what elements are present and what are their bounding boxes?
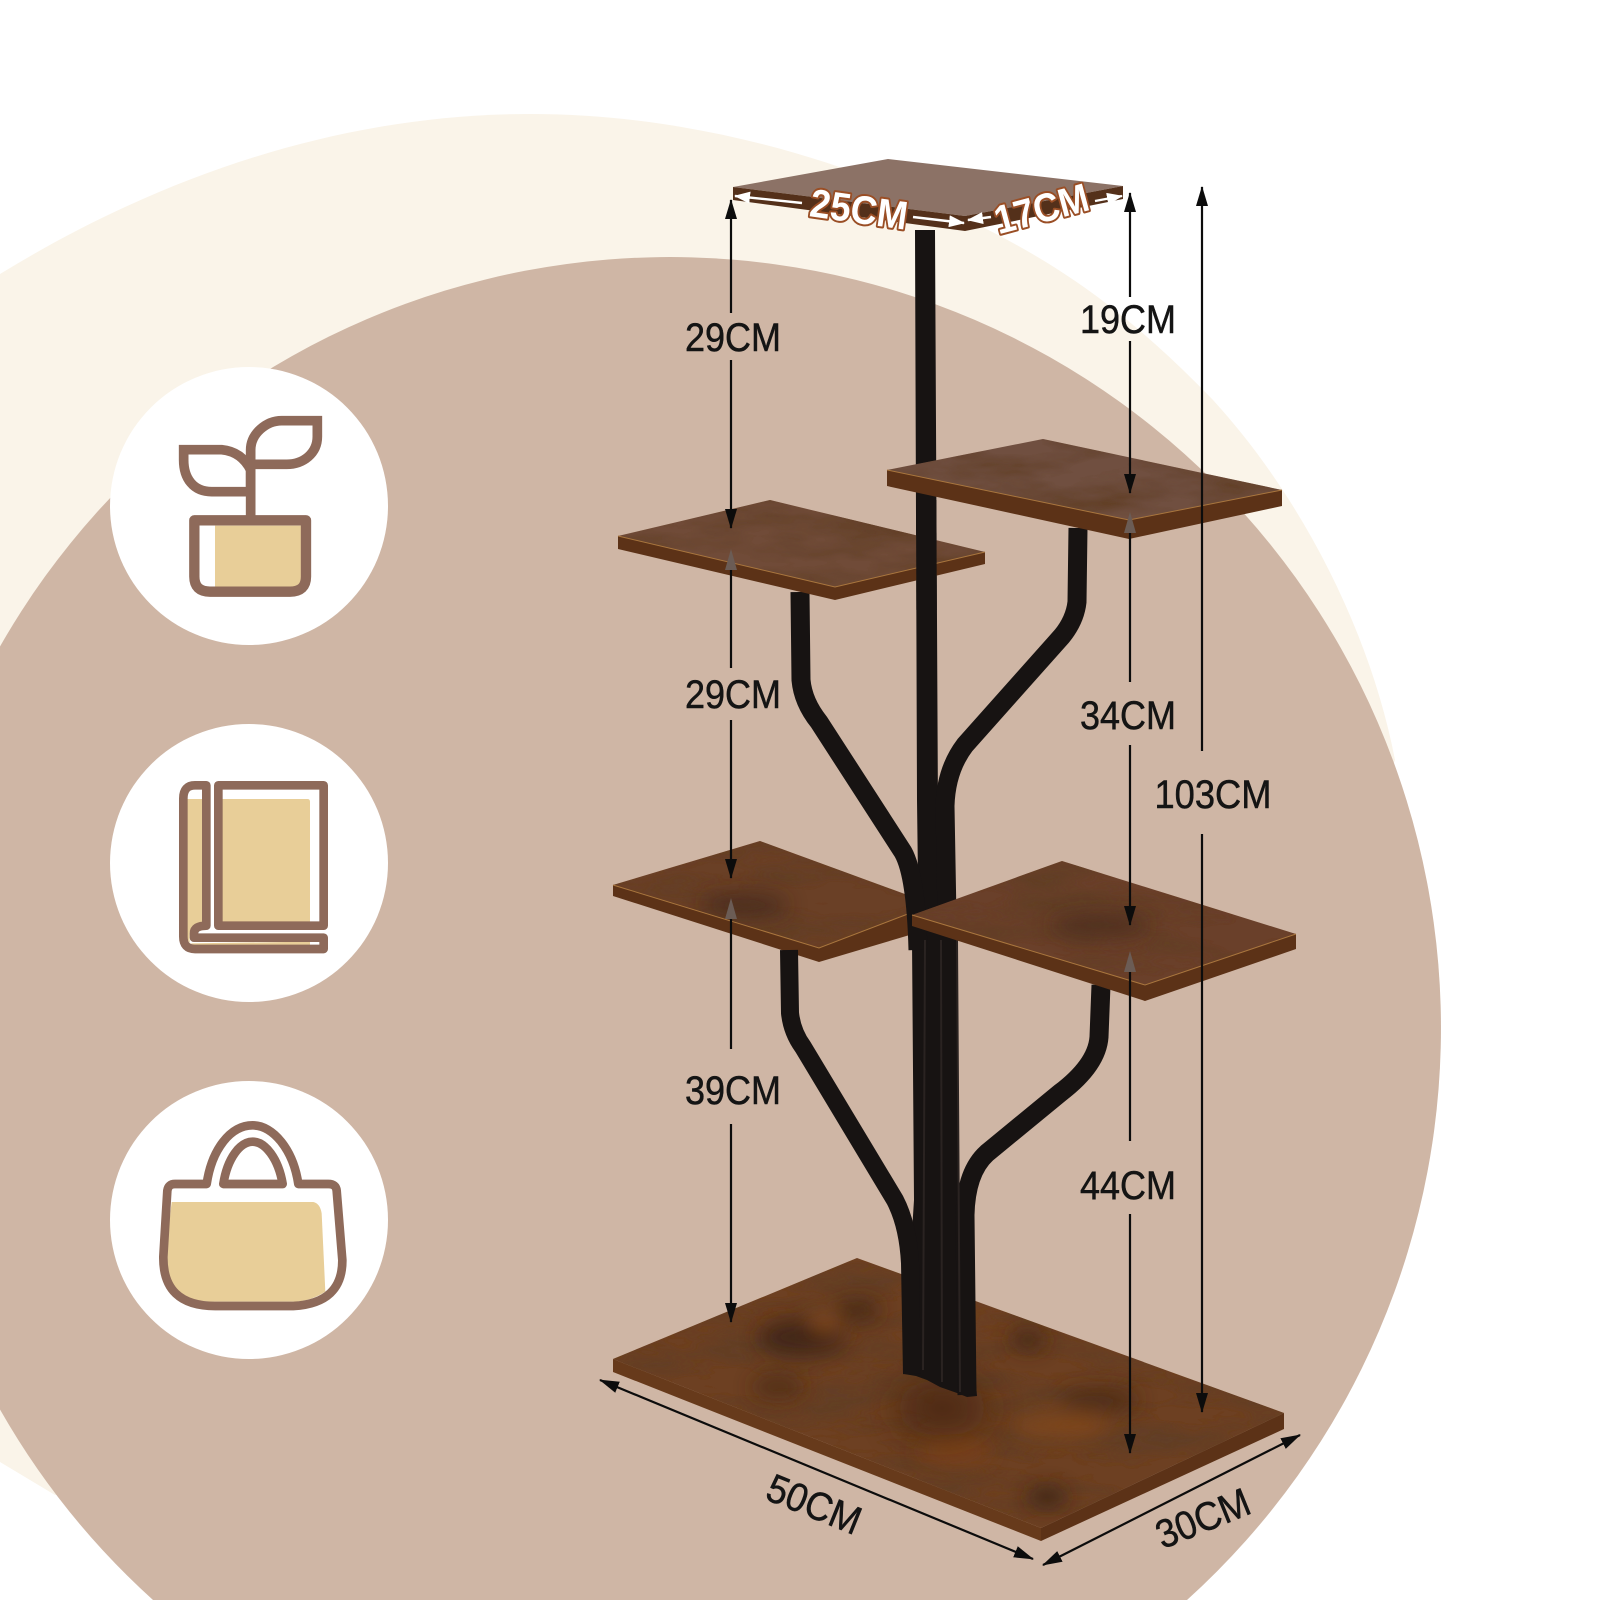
trunk: groove lines <box>923 940 960 1392</box>
furniture: upper right shelf <box>887 439 1282 539</box>
dimension: left column heights: 39CM <box>685 1069 781 1113</box>
dimension: right column heights: 34CM <box>1080 694 1176 738</box>
dimension: base width 30CM: 30CM <box>1149 1480 1257 1558</box>
dimension: left column heights <box>685 200 781 1322</box>
dimension: right column heights <box>1080 193 1176 1453</box>
background: cream blob <box>0 114 1395 1500</box>
furniture: base board <box>613 1258 1284 1541</box>
dimension: base length 50CM <box>600 1380 1033 1559</box>
furniture: upper left shelf <box>618 500 985 610</box>
furniture: lower right shelf <box>912 861 1296 1001</box>
branch: lower right <box>965 985 1101 1395</box>
dimension: right column heights: 44CM <box>1080 1164 1176 1208</box>
dimension: 25CM and 17CM on the top shelf <box>735 176 1122 243</box>
panel: book icon <box>110 724 388 1002</box>
pole: passes in front of the shelf <box>916 500 937 610</box>
dimension: left column heights: 29CM <box>685 316 781 360</box>
dimension: right column heights: 19CM <box>1080 298 1176 342</box>
dimension: left column heights: 29CM <box>685 673 781 717</box>
branch: lower left <box>789 950 912 1374</box>
dimension: base width 30CM <box>1043 1435 1300 1565</box>
dimension: total height 103CM: 103CM <box>1154 773 1272 817</box>
furniture: lower left shelf <box>613 841 913 962</box>
panel: plant icon <box>110 367 388 645</box>
trunk: centre bundle <box>904 230 977 1397</box>
background: tan circle <box>0 257 1441 1600</box>
dimension: base length 50CM: 50CM <box>760 1466 868 1544</box>
furniture: top shelf <box>733 159 1123 231</box>
dimension: 25CM and 17CM on the top shelf: 17CM <box>990 176 1094 243</box>
branch: upper right <box>945 528 1078 918</box>
panel: bag icon <box>110 1081 388 1359</box>
furniture: metal trunk and branches <box>789 230 1101 1397</box>
dimension: 25CM and 17CM on the top shelf: 25CM <box>807 182 910 239</box>
branch: upper left <box>800 592 918 950</box>
